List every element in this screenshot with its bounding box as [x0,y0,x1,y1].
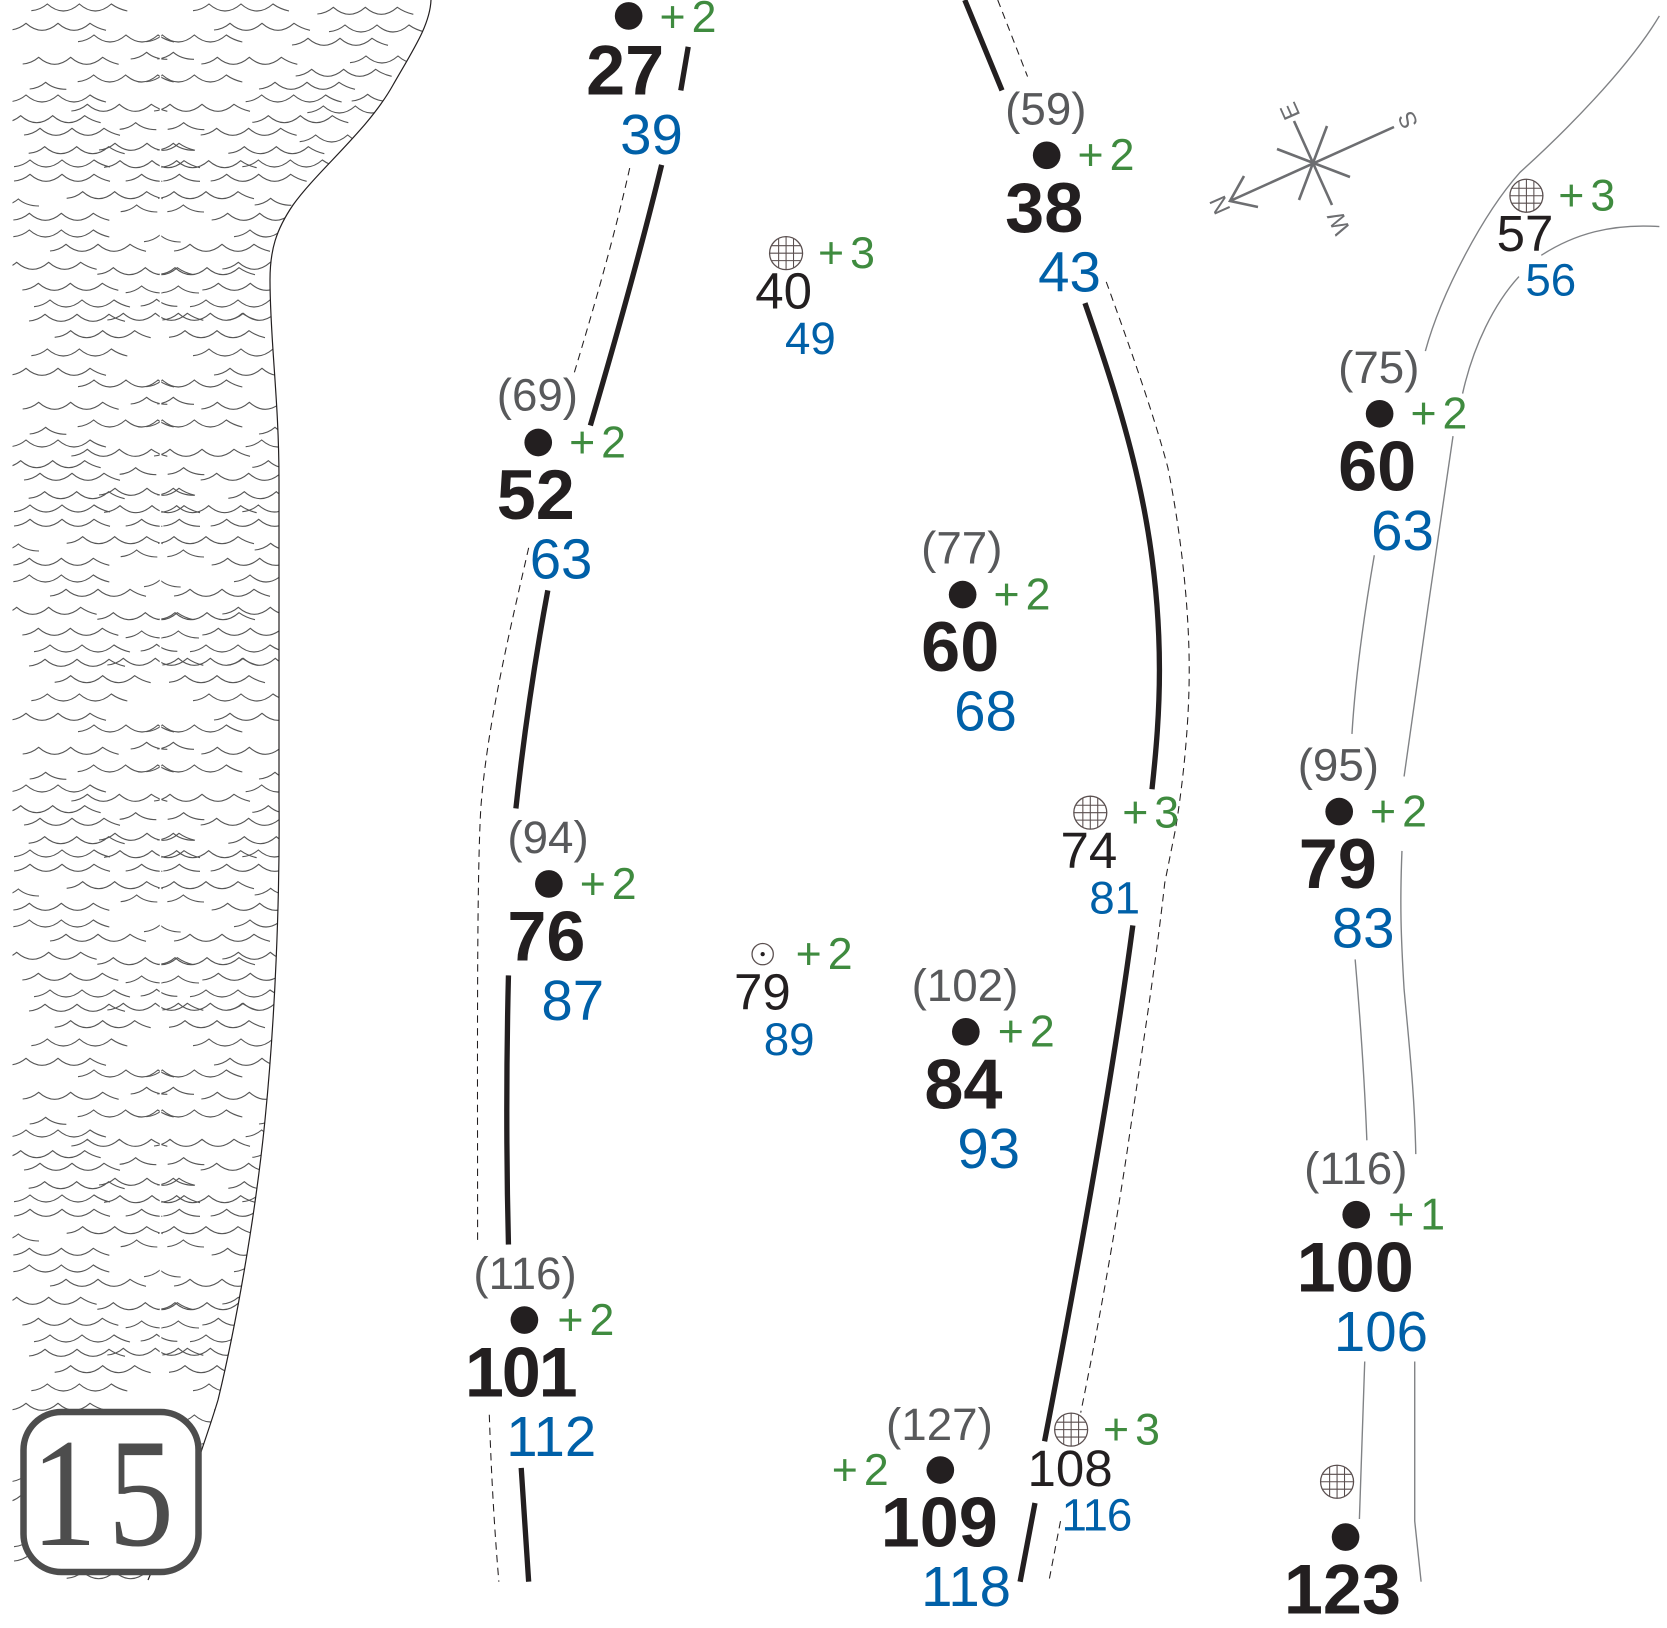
left road: thick line [507,47,688,1582]
station 109: 118 [921,1555,1011,1618]
station 27: 27 [586,31,664,110]
water hatching [1,0,446,1580]
station 100: 106 [1334,1300,1428,1363]
station 123: 123 [1284,1550,1401,1628]
minor station 40: 49 [785,313,836,364]
station 52: (69) [497,370,578,421]
marker [949,581,976,608]
left road: dashed line [477,168,630,1582]
middle road: thick line [965,0,1159,1582]
station 52: 63 [530,528,592,591]
marker [535,870,563,898]
compass rose: W [1322,207,1356,239]
minor station 57 [1497,172,1615,306]
station 60 center: 68 [954,680,1017,743]
station 84: + 2 [998,1008,1055,1057]
station 109: + 2 [832,1446,889,1495]
icon: grid circle [1055,1413,1088,1446]
minor station 79: 79 [734,963,791,1020]
station 79 right: 79 [1299,824,1377,903]
station 76: 87 [541,969,604,1032]
station 60 right: 63 [1371,499,1434,562]
station 52: + 2 [569,418,626,467]
compass rose [1205,98,1424,239]
minor station 108: 116 [1062,1490,1131,1541]
station 109: (127) [886,1399,993,1450]
station 84: (102) [912,960,1018,1011]
station 27 [586,0,716,166]
marker [1366,400,1393,428]
marker [1325,798,1353,825]
station 123 [1284,1465,1401,1628]
minor station 79: + 2 [796,930,853,979]
station 38: (59) [1005,83,1087,134]
minor station 74 [1061,789,1179,924]
station 60 right: 60 [1338,426,1416,505]
right road: left edge [1352,16,1659,1519]
station 60 right: (75) [1338,342,1419,393]
station 100: + 1 [1388,1191,1445,1240]
minor station 79 [734,930,853,1065]
station 60 right: + 2 [1410,390,1467,439]
station 84: 93 [957,1117,1020,1180]
map content, scaled group [465,0,1659,1628]
station 60 center [921,523,1050,743]
station 101: 101 [465,1333,577,1412]
station 60 right [1338,342,1467,562]
minor station 40 [755,229,875,364]
station 60 center: (77) [921,523,1002,574]
station 60 center: 60 [921,607,999,686]
minor station 57: + 3 [1558,172,1615,221]
marker [926,1456,954,1484]
station 100: (116) [1304,1143,1407,1194]
minor station 79: 89 [764,1014,815,1065]
icon: grid circle [1510,179,1543,212]
coastline [148,0,431,1580]
station 109 [832,1399,1011,1618]
station 76: + 2 [580,860,637,909]
minor station 108 [1028,1406,1160,1541]
icon: grid circle [1321,1465,1354,1498]
marker [1342,1201,1370,1229]
station 38: 43 [1038,240,1101,303]
minor station 74: 81 [1089,873,1140,924]
station 27: 39 [620,103,683,166]
station 101 [465,1248,614,1468]
station 84 [912,960,1055,1180]
station 100: 100 [1297,1227,1414,1306]
compass rose: E [1275,98,1306,124]
minor station 57: 57 [1497,205,1553,262]
station 84: 84 [924,1044,1002,1123]
right road: right edge [1401,226,1659,1582]
marker [511,1306,538,1334]
minor station 108: 108 [1028,1440,1113,1497]
station 101: 112 [506,1405,596,1468]
minor station 74: + 3 [1122,789,1179,838]
station 60 center: + 2 [993,571,1050,620]
minor station 74: 74 [1061,822,1117,879]
icon: grid circle [1074,796,1107,829]
minor station 40: + 3 [818,229,875,278]
station 76 [507,812,637,1032]
marker [952,1018,980,1046]
minor station 40: 40 [755,262,812,319]
station 100 [1297,1143,1445,1363]
minor station 108: + 3 [1103,1406,1160,1455]
station 79 right: + 2 [1370,787,1427,836]
minor station 57: 56 [1525,255,1576,306]
station 101: + 2 [557,1296,614,1345]
compass rose: S [1393,107,1424,133]
icon: grid circle [770,237,803,270]
station 79 right: (95) [1298,740,1379,791]
station 52: 52 [497,455,575,534]
marker [524,429,552,456]
station 79 right: 83 [1332,897,1394,960]
station 79 right [1298,740,1427,960]
station 38 [1005,83,1134,303]
station 38: + 2 [1078,131,1134,180]
middle road: dashed line [998,0,1189,1582]
station 76: (94) [507,812,589,863]
marker [1033,141,1061,169]
station 109: 109 [881,1483,998,1562]
compass rose: N [1205,191,1236,218]
icon: dotted circle [752,944,773,965]
marker [615,2,642,30]
map number badge: 15 [31,1408,174,1579]
station 52 [497,370,626,591]
station 38: 38 [1005,168,1083,247]
station 76: 76 [507,897,585,976]
station 101: (116) [473,1248,577,1299]
